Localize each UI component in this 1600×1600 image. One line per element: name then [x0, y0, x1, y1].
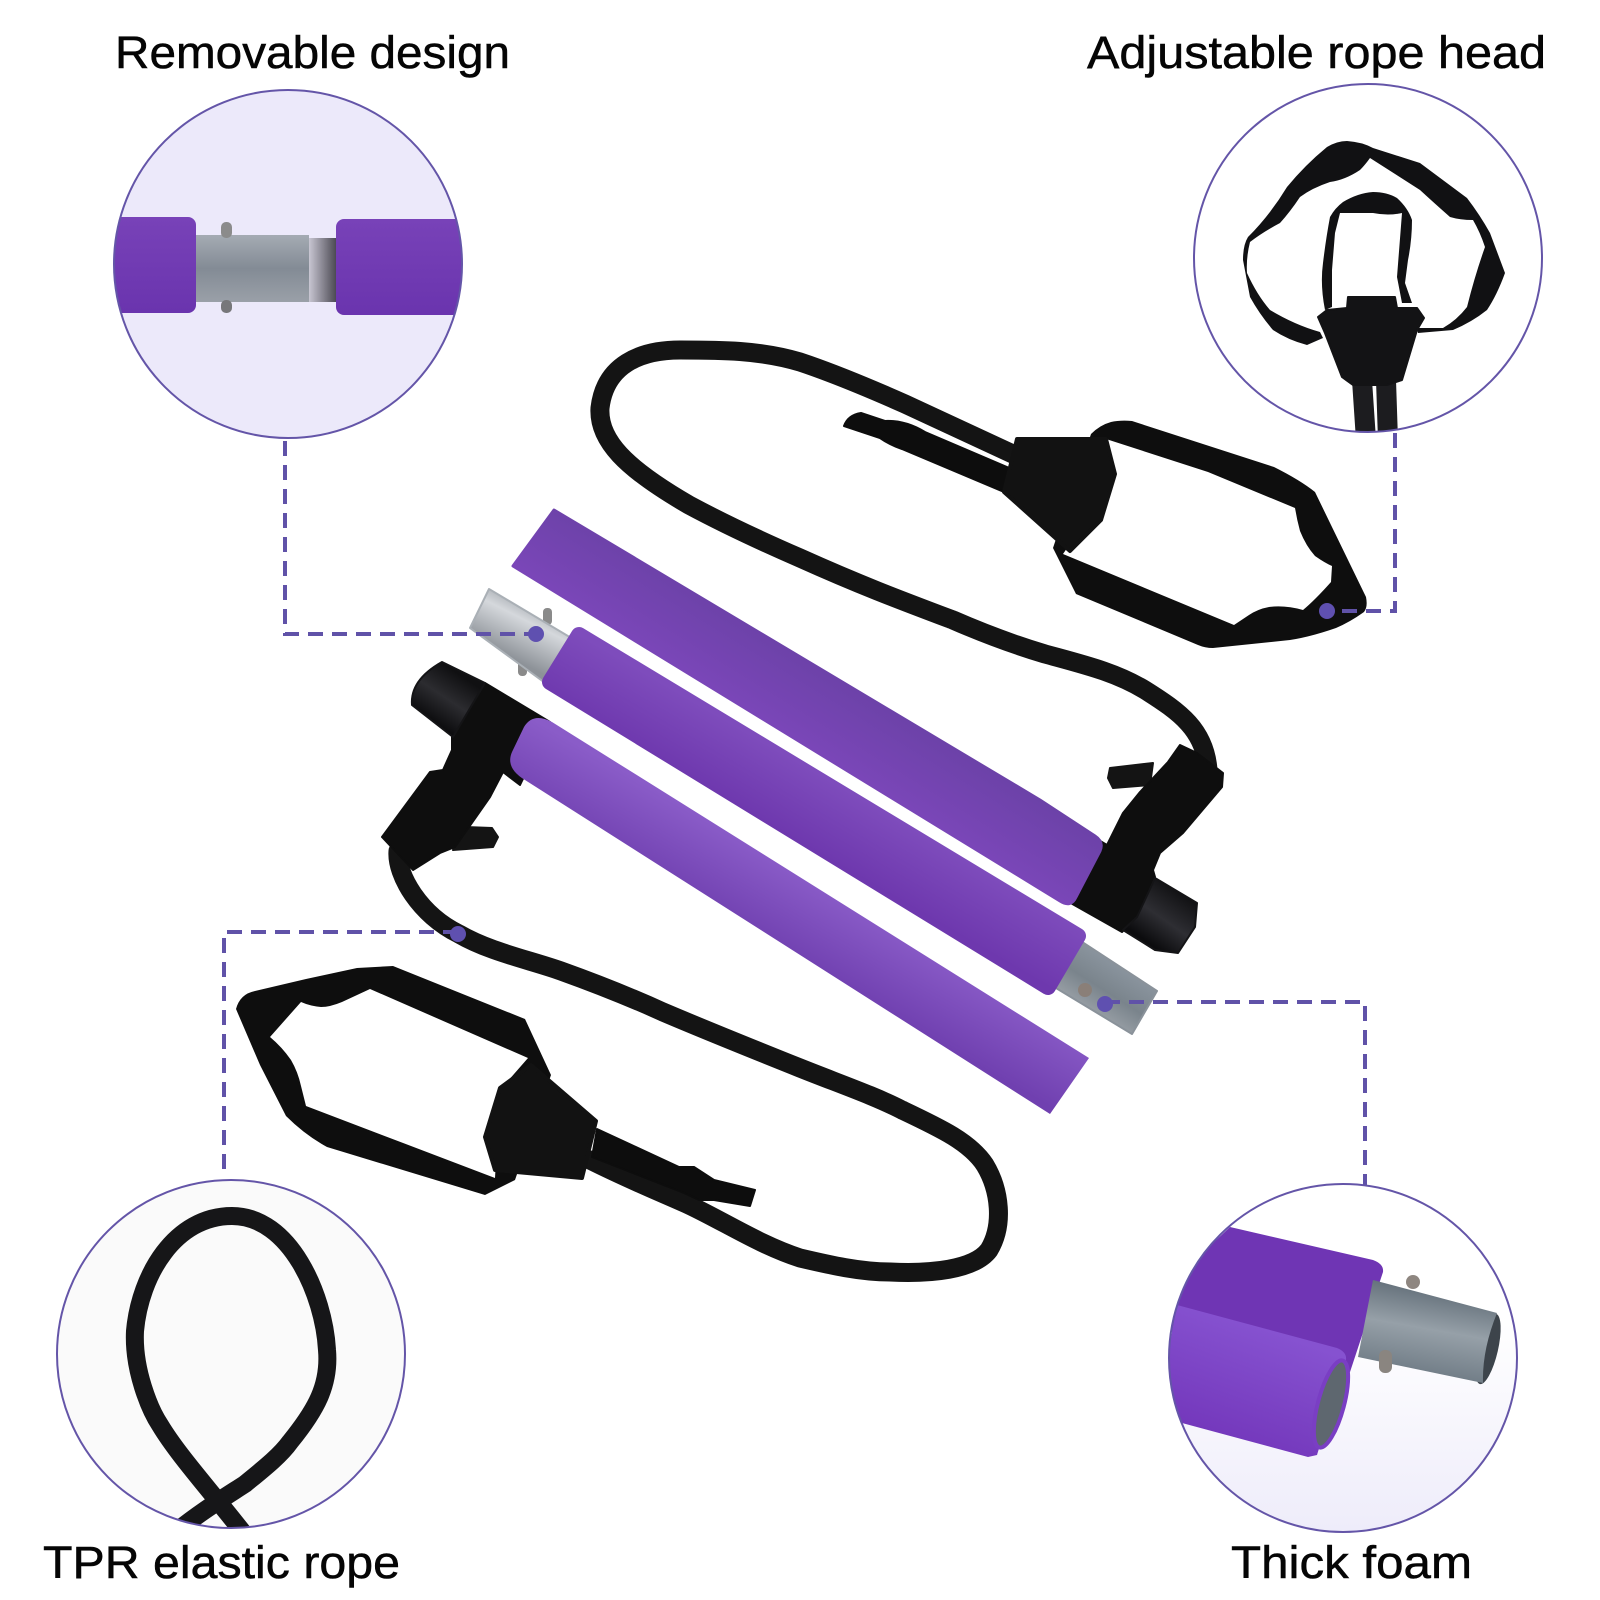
title: TPR elastic rope: TPR elastic rope: [43, 1537, 400, 1588]
strap: [382, 683, 550, 870]
tail: [592, 1129, 755, 1206]
dashed leader: adjustable rope head: [1319, 433, 1395, 619]
pin left bottom: [518, 661, 527, 676]
callout circle: TPR elastic rope: [57, 1180, 405, 1535]
metal tube: [192, 235, 309, 302]
left foam: [115, 217, 196, 313]
connector: [1004, 439, 1115, 551]
middle bar metal tube left: [470, 589, 578, 688]
nub: [453, 827, 498, 850]
lower elastic rope: [398, 851, 998, 1272]
strap: [236, 966, 551, 1195]
right foam: [336, 219, 461, 315]
middle bar metal tube right: [1046, 938, 1157, 1034]
connector: [1318, 297, 1424, 385]
cables: [1362, 380, 1388, 440]
lower rope handle: [236, 966, 755, 1206]
lower foam: [1168, 1305, 1346, 1457]
callout circle: adjustable rope head: [1194, 84, 1542, 440]
tail: [844, 413, 1014, 492]
title: Thick foam: Thick foam: [1231, 1537, 1472, 1588]
upper rope handle: [844, 413, 1367, 648]
tube opening: [1477, 1314, 1501, 1384]
dashed leader: thick foam: [1097, 996, 1365, 1185]
callout circle: thick foam: [1165, 1184, 1517, 1532]
middle foam sleeve: [550, 635, 1078, 987]
upper foam: [1165, 1227, 1383, 1372]
strap: [1053, 421, 1367, 648]
top foam sleeve: [513, 510, 1101, 904]
title: Removable design: Removable design: [115, 27, 510, 78]
strap: [1060, 745, 1223, 932]
shadow gap: [309, 238, 336, 302]
pin right: [1078, 983, 1092, 997]
cap: [412, 662, 485, 737]
pins: [1406, 1275, 1420, 1289]
rope loop: [135, 1216, 327, 1535]
callout circle: removable design: [100, 90, 476, 438]
pins: [221, 222, 232, 238]
main product: pilates bar with resistance ropes: [236, 350, 1367, 1272]
title: Adjustable rope head: Adjustable rope head: [1087, 27, 1546, 78]
nub: [1108, 763, 1153, 788]
dashed leader: removable design: [285, 441, 544, 642]
bottom foam sleeve: [510, 718, 1089, 1114]
right end cap and strap: [1060, 745, 1223, 953]
metal tube: [1358, 1280, 1497, 1383]
connector: [485, 1065, 596, 1178]
foam tube end: [1316, 1358, 1350, 1450]
pin left top: [543, 608, 552, 625]
left end cap and strap: [382, 662, 550, 870]
upper elastic rope: [600, 350, 1208, 770]
cap: [1123, 878, 1197, 953]
dashed leader: TPR elastic rope: [224, 926, 466, 1176]
outer strap: [1243, 141, 1505, 345]
inner strap: [1322, 192, 1412, 310]
